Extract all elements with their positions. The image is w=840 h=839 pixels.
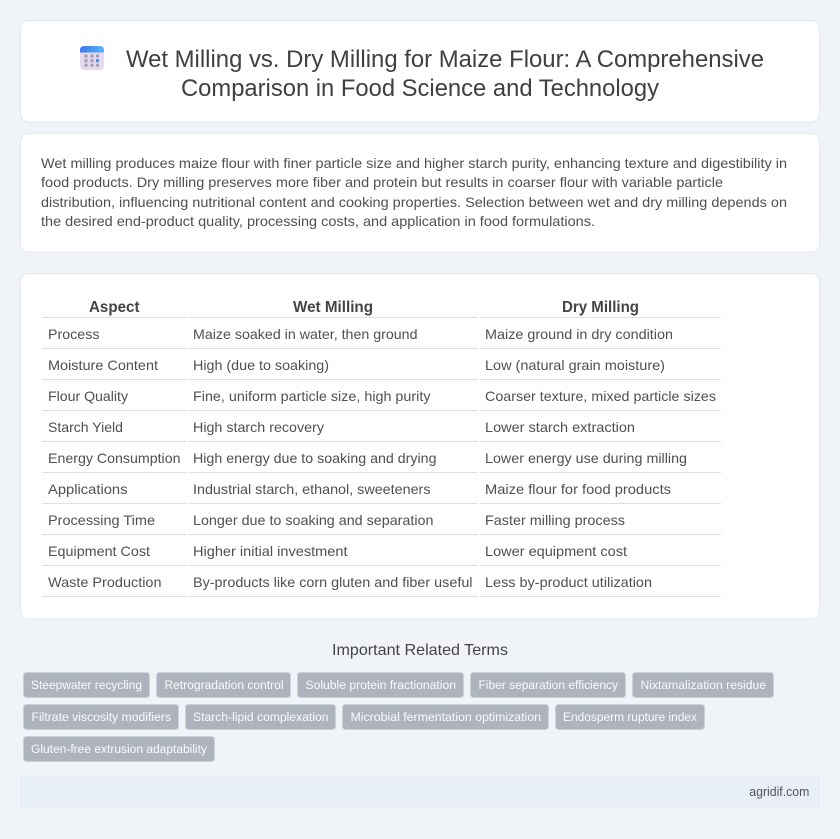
row: process [48,326,673,342]
row: applications [48,481,671,497]
tag [470,672,626,698]
row: waste production: Less by-product utilization [485,574,652,590]
row: waste production: Waste Production [48,574,162,590]
row: energy consumption: Energy Consumption [48,450,180,466]
row: flour quality: Coarser texture, mixed particle sizes [485,388,716,404]
tag: Endosperm rupture index [563,710,697,724]
row: moisture content: Low (natural grain moisture) [485,357,665,373]
row: energy consumption [48,450,687,466]
footer: agridif.com [749,785,809,799]
row: equipment cost [48,543,627,559]
title [126,46,764,102]
tag: Microbial fermentation optimization [350,710,541,724]
row: applications: Industrial starch, ethanol, sweeteners [193,481,430,497]
row: equipment cost: Equipment Cost [48,543,150,559]
row: starch yield: Lower starch extraction [485,419,635,435]
row: processing time: Longer due to soaking and separation [193,512,434,528]
table header: Dry Milling [562,299,639,316]
row: waste production: By-products like corn gluten and fiber useful [193,574,472,590]
row: process: Maize soaked in water, then ground [193,326,418,342]
row: applications: Applications [48,481,128,497]
summary text: Wet milling produces maize flour with finer particle size and higher starch purity, enhancing texture and digestibility in [41,155,787,171]
tags: related terms [24,672,774,762]
summary text [41,155,787,229]
row: flour quality: Fine, uniform particle size, high purity [193,388,430,404]
row: waste production [48,574,652,590]
summary text: food products. Dry milling preserves more fiber and protein but results in coarser flour with variable particle [41,174,723,190]
row: starch yield [48,419,635,435]
row: starch yield: High starch recovery [193,419,324,435]
panel: title card [20,20,820,122]
row: equipment cost: Higher initial investment [193,543,348,559]
table header: Aspect [89,299,140,316]
row: flour quality: Flour Quality [48,388,128,404]
row: moisture content: Moisture Content [48,357,158,373]
row: flour quality [48,388,716,404]
row: process: Maize ground in dry condition [485,326,673,342]
tag: Filtrate viscosity modifiers [32,710,171,724]
summary text: distribution, influencing nutritional content and cooking properties. Selection between wet and dry milling depends on [41,194,787,210]
panel: comparison table [20,274,820,619]
tag [156,672,290,698]
row: equipment cost: Lower equipment cost [485,543,627,559]
tag [24,672,150,698]
table header [89,299,639,316]
tag: Steepwater recycling [31,678,142,692]
summary text: the desired end-product quality, processing costs, and application in food formulations. [41,213,595,229]
row: process: Process [48,326,100,342]
title: Wet Milling vs. Dry Milling for Maize Flour: A Comprehensive [126,46,764,73]
tag: Fiber separation efficiency [478,678,619,692]
tag [24,736,214,762]
tag [556,704,704,730]
row: energy consumption: Lower energy use during milling [485,450,687,466]
row: energy consumption: High energy due to soaking and drying [193,450,436,466]
tag: Soluble protein fractionation [306,678,456,692]
tag [186,704,336,730]
tag: Starch-lipid complexation [193,710,328,724]
icon: calendar [80,46,104,70]
table header: Wet Milling [293,299,373,316]
tag [24,704,178,730]
tag [342,704,548,730]
tag [632,672,774,698]
tag: Retrogradation control [164,678,284,692]
row: moisture content: High (due to soaking) [193,357,329,373]
heading: important related terms: Important Related Terms [332,642,508,659]
row: applications: Maize flour for food products [485,481,671,497]
tag: Gluten-free extrusion adaptability [31,742,208,756]
title: Comparison in Food Science and Technology [181,75,660,102]
tag: Nixtamalization residue [640,678,766,692]
tag [298,672,464,698]
row: processing time: Processing Time [48,512,155,528]
footer [20,775,820,809]
row: starch yield: Starch Yield [48,419,123,435]
row: moisture content [48,357,665,373]
panel: summary [20,134,820,252]
row: processing time [48,512,625,528]
row: processing time: Faster milling process [485,512,625,528]
